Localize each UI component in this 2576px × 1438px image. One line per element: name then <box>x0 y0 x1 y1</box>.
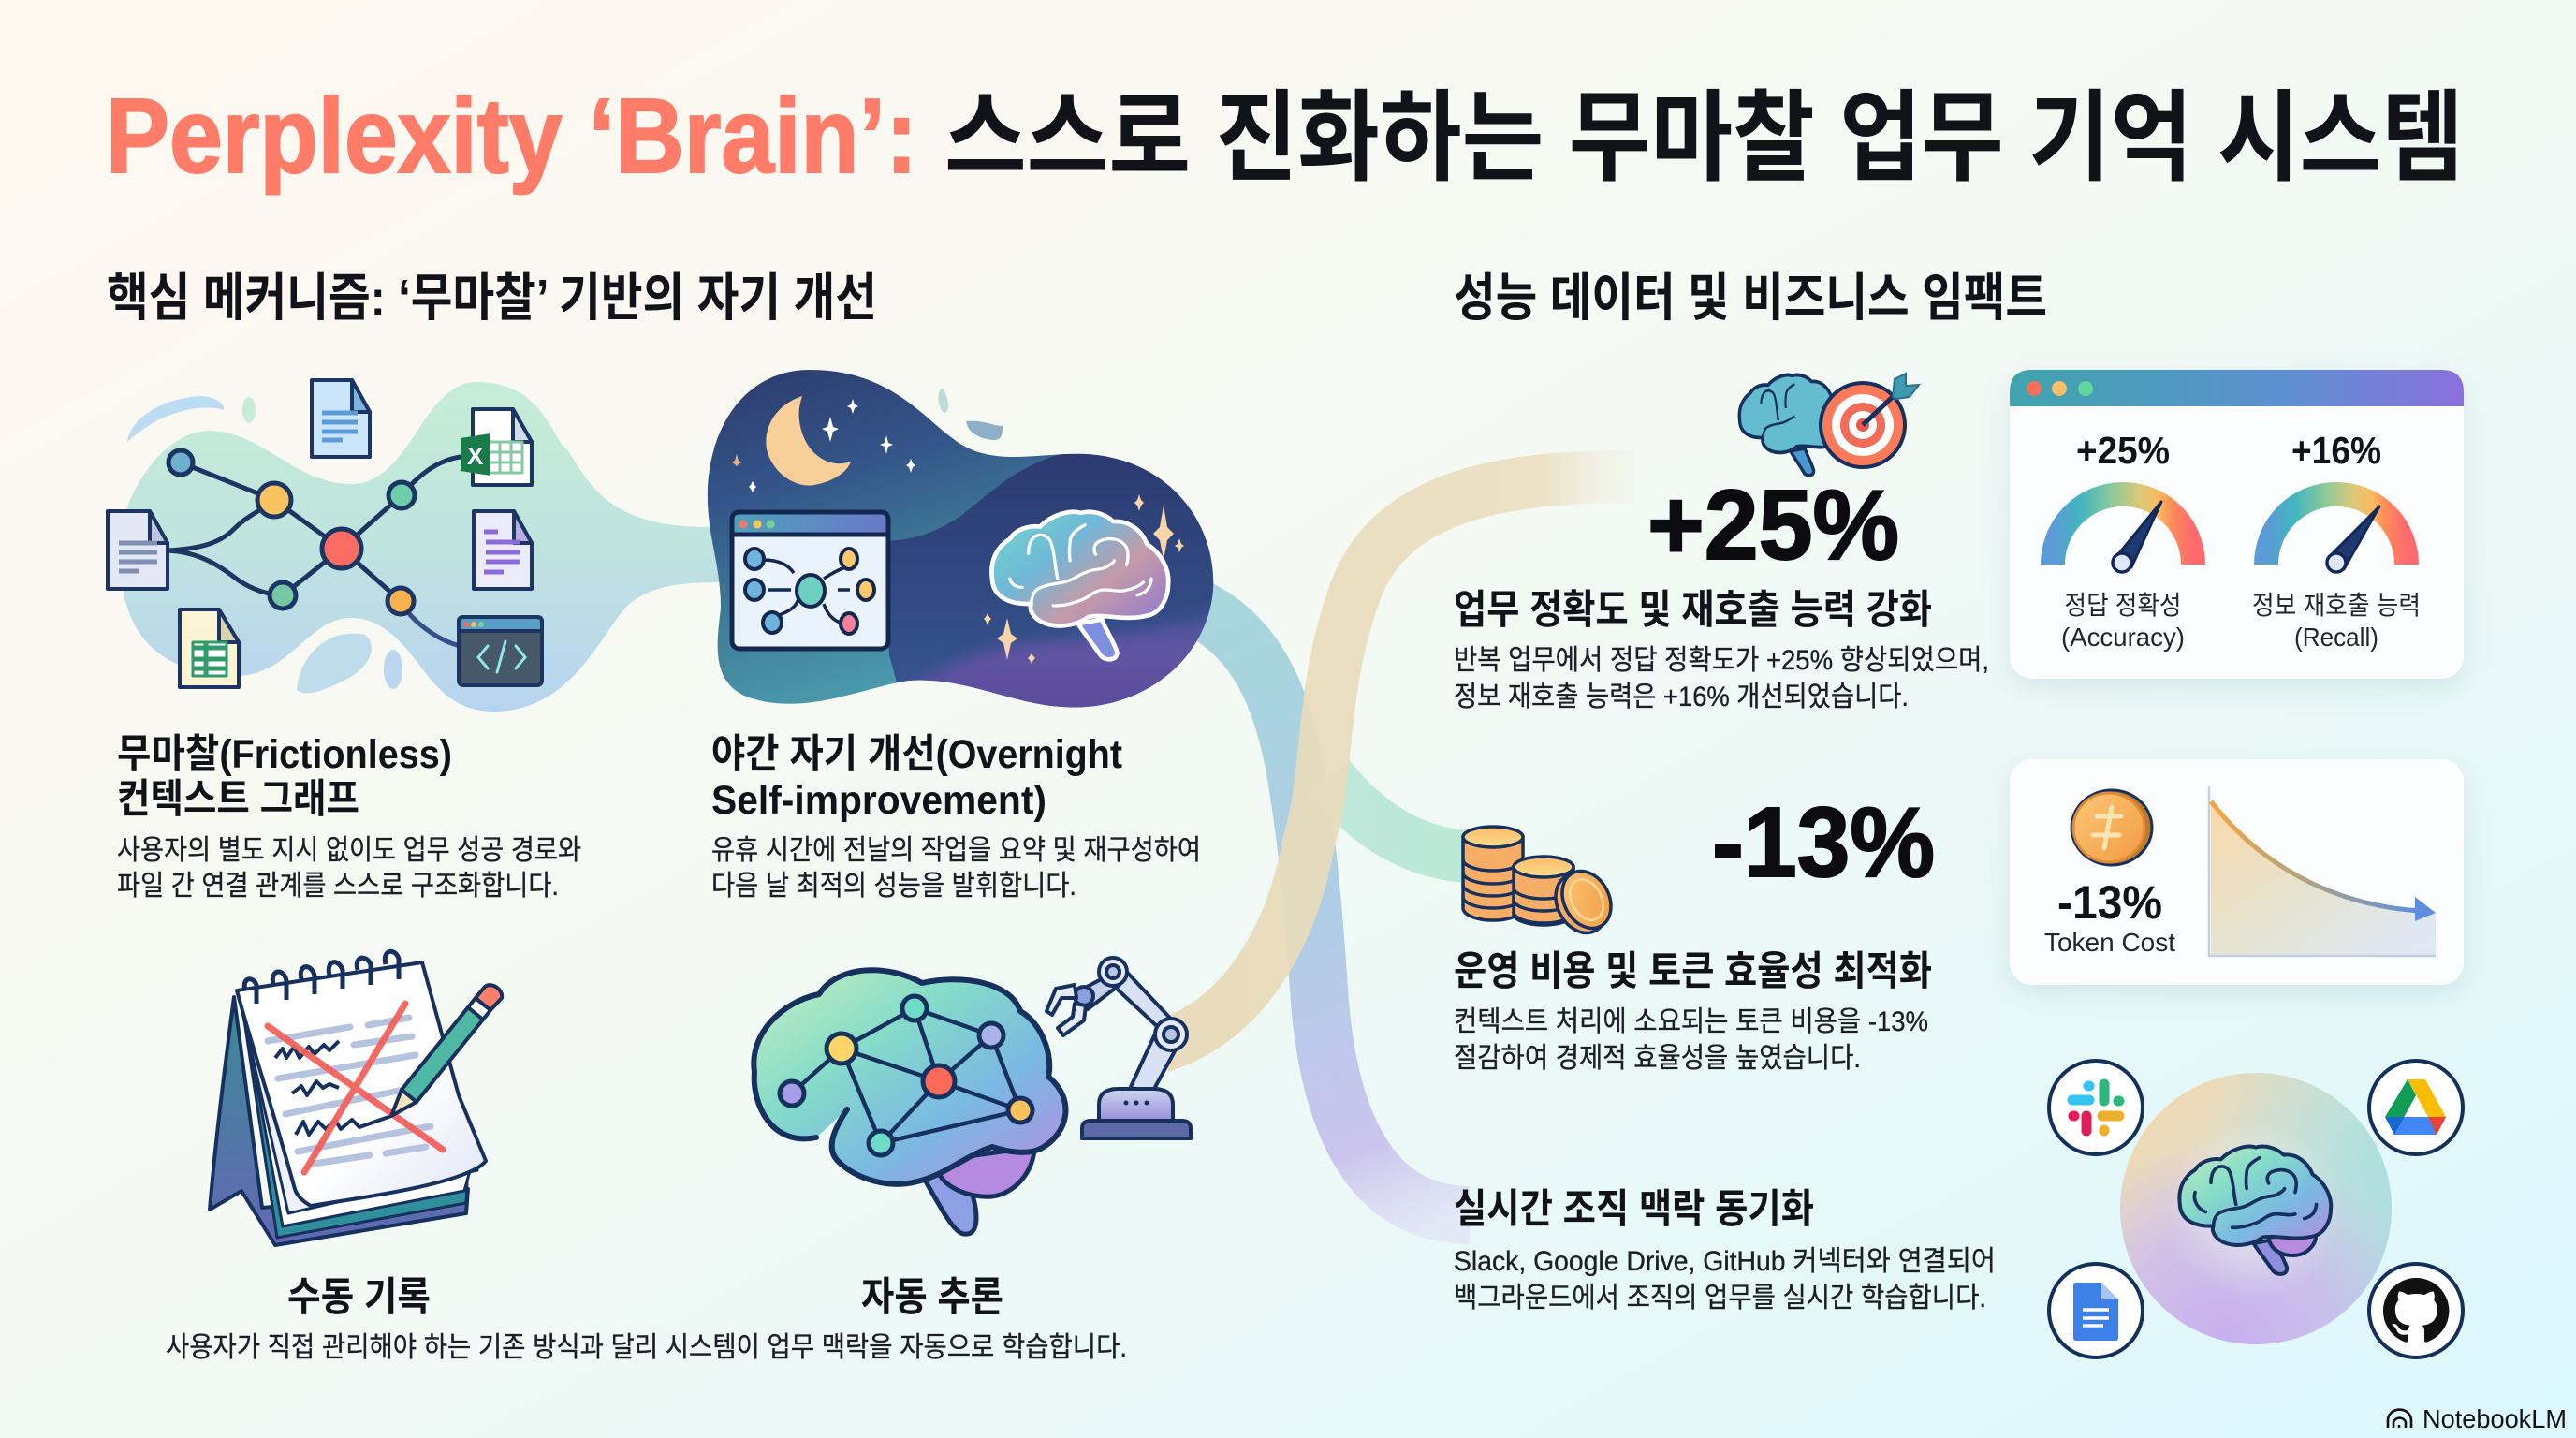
doc: blue <box>312 380 370 457</box>
text block: cost: 컨텍스트 처리에 소요되는 토큰 비용을 -13% <box>1454 1006 1928 1037</box>
icon: google drive <box>2369 1061 2463 1154</box>
text block: overnight: 다음 날 최적의 성능을 발휘합니다. <box>711 871 1076 902</box>
stat: -13%: -13% <box>1712 787 1935 898</box>
text block: comparison sentence: 사용자가 직접 관리해야 하는 기존 방식과 달리 시스템이 업무 맥락을 자동으로 학습합니다. <box>166 1332 1127 1363</box>
icon: glowing brain <box>991 512 1168 659</box>
title <box>106 77 2464 195</box>
note lines <box>268 1018 431 1164</box>
icon: slack <box>2049 1061 2143 1154</box>
text block: realtime sync <box>1454 1187 1996 1313</box>
gauge: accuracy: (Accuracy) <box>2061 623 2185 652</box>
graph nodes <box>168 450 415 614</box>
label: auto inference: 자동 추론 <box>861 1275 1003 1320</box>
heading: core mechanism: 핵심 메커니즘: ‘무마찰’ 기반의 자기 개선 <box>107 269 877 327</box>
panel: overnight self-improvement illustration <box>708 370 1213 708</box>
gauge: accuracy <box>2053 429 2193 652</box>
icon: coin stacks <box>1463 827 1620 942</box>
text block: frictionless: 컨텍스트 그래프 <box>117 777 359 822</box>
label: manual notes: 수동 기록 <box>287 1275 431 1320</box>
gauge: recall: +16% <box>2291 429 2381 472</box>
icon: network brain <box>754 970 1066 1234</box>
panel: token cost card <box>2010 759 2464 985</box>
text block: frictionless: 사용자의 별도 지시 없이도 업무 성공 경로와 <box>117 835 581 866</box>
icon: crossed-out notepad <box>210 951 502 1245</box>
icon: center brain <box>2179 1147 2331 1274</box>
text block: accuracy <box>1454 588 1989 712</box>
icon: robot arm <box>1046 958 1191 1138</box>
text block: realtime sync: 실시간 조직 맥락 동기화 <box>1454 1187 1814 1232</box>
doc: purple <box>474 511 532 589</box>
scribbles <box>275 1041 391 1135</box>
brain network edges <box>792 1008 1020 1143</box>
title: Perplexity ‘Brain’: <box>106 77 917 195</box>
text block: overnight: Self-improvement) <box>711 778 1046 823</box>
stars <box>732 399 915 492</box>
heading: performance data: 성능 데이터 및 비즈니스 임팩트 <box>1454 269 2047 327</box>
text block: overnight <box>711 732 1201 902</box>
panel: gauges card <box>2010 370 2464 679</box>
window: agent graph <box>732 512 888 649</box>
text block: frictionless: 무마찰(Frictionless) <box>117 732 452 777</box>
panel: token cost card: Token Cost <box>2044 928 2175 957</box>
icon: google docs <box>2049 1264 2143 1357</box>
doc: left <box>108 511 168 589</box>
text block: overnight: 유휴 시간에 전날의 작업을 요약 및 재구성하여 <box>711 835 1201 866</box>
panel: connector orb <box>2049 1061 2463 1357</box>
gauge: accuracy: 정답 정확성 <box>2065 591 2181 620</box>
spiral rings <box>244 951 399 1004</box>
doc: yellow sheet <box>180 609 239 687</box>
gauge: recall: (Recall) <box>2294 623 2378 652</box>
red cross <box>268 1004 443 1172</box>
text block: accuracy: 업무 정확도 및 재호출 능력 강화 <box>1454 588 1932 633</box>
icon: crescent moon <box>766 396 851 486</box>
chart: falling token cost <box>2209 786 2436 956</box>
text block: frictionless <box>117 732 581 902</box>
watermark: NotebookLM: NotebookLM <box>2422 1404 2567 1433</box>
icon: brain and target <box>1739 374 1919 476</box>
text block: realtime sync: 백그라운드에서 조직의 업무를 실시간 학습합니다. <box>1454 1283 1986 1313</box>
panel: token cost card: -13% <box>2057 876 2162 929</box>
graph edges <box>168 457 461 646</box>
sparkles <box>984 494 1184 664</box>
text block: cost <box>1454 949 1932 1074</box>
text block: realtime sync: Slack, Google Drive, GitHub 커넥터와 연결되어 <box>1454 1246 1996 1277</box>
icon: github <box>2369 1264 2463 1357</box>
gauge: recall: 정보 재호출 능력 <box>2252 591 2421 620</box>
flow ribbons <box>1161 477 1633 1215</box>
text block: cost: 절감하여 경제적 효율성을 높였습니다. <box>1454 1043 1861 1074</box>
stat: +25%: +25% <box>1647 470 1899 580</box>
panel: frictionless context graph illustration <box>108 380 721 712</box>
code window <box>459 617 542 685</box>
doc: excel: X <box>467 442 484 470</box>
gauge: recall <box>2252 429 2421 652</box>
text block: overnight: 야간 자기 개선(Overnight <box>711 732 1122 777</box>
text block: cost: 운영 비용 및 토큰 효율성 최적화 <box>1454 949 1932 994</box>
doc: excel <box>461 409 532 485</box>
brain network nodes <box>780 996 1032 1155</box>
icon: token coin <box>2071 790 2152 865</box>
text block: accuracy: 정보 재호출 능력은 +16% 개선되었습니다. <box>1454 682 1909 712</box>
text block: frictionless: 파일 간 연결 관계를 스스로 구조화합니다. <box>117 871 559 902</box>
gauge: accuracy: +25% <box>2076 429 2170 472</box>
text block: accuracy: 반복 업무에서 정답 정확도가 +25% 향상되었으며, <box>1454 645 1989 676</box>
pencil <box>391 985 502 1116</box>
